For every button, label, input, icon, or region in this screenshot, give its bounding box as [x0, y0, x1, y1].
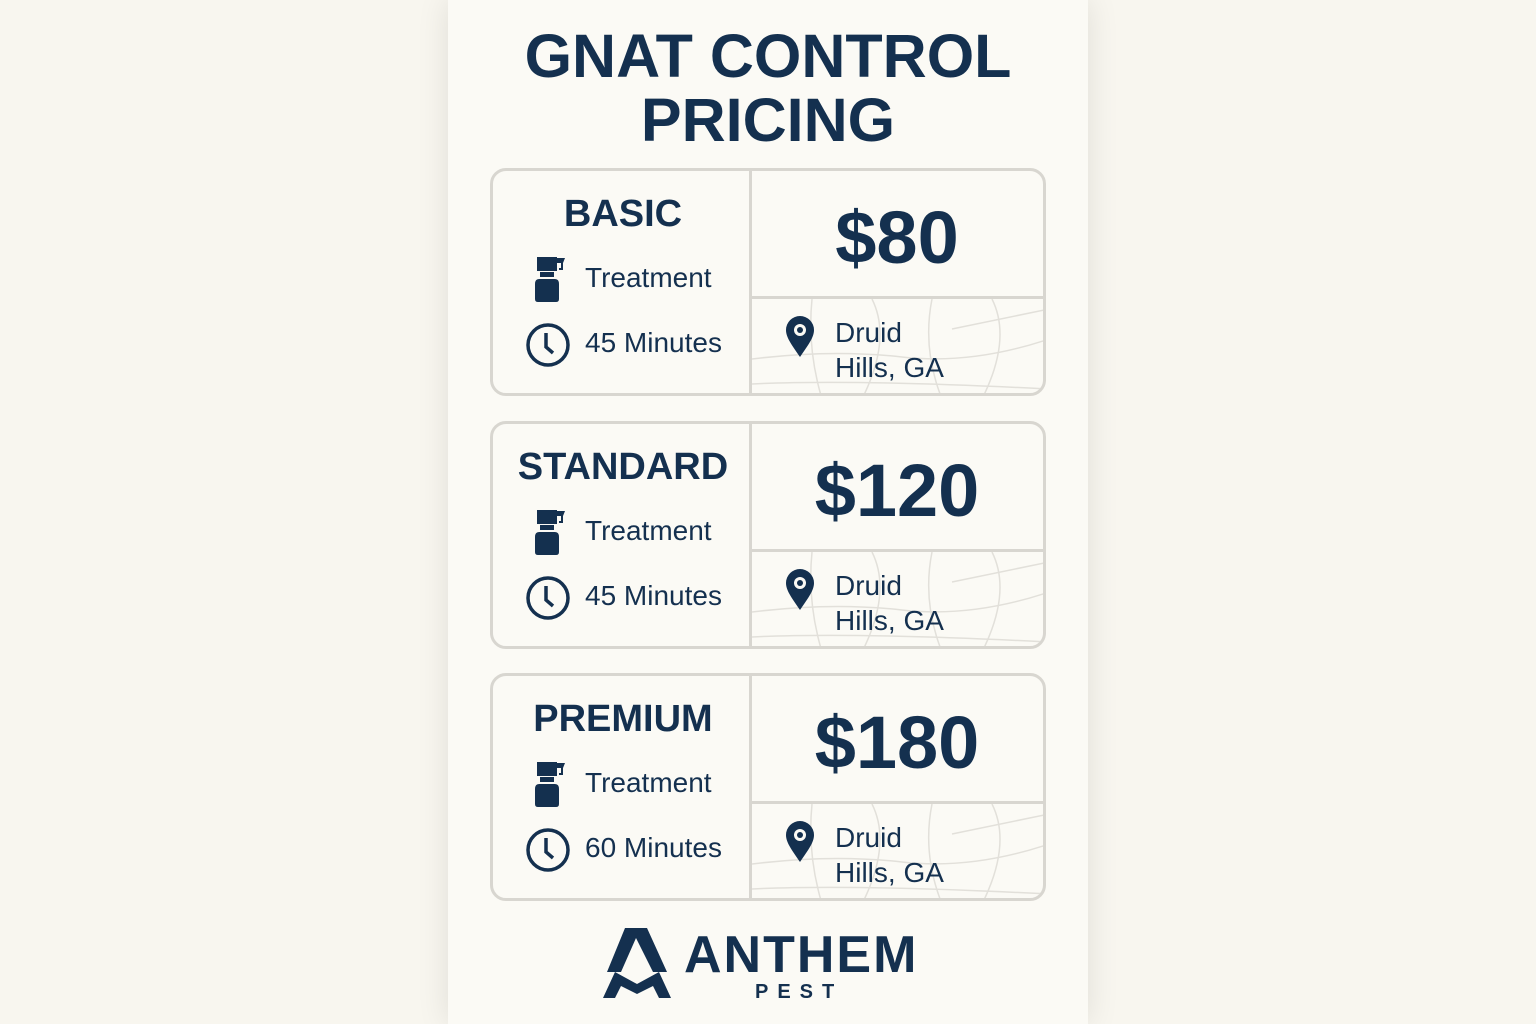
location — [835, 317, 944, 383]
icon: spray bottle — [535, 510, 565, 555]
card: standard — [490, 421, 1046, 649]
tier name: BASIC — [564, 193, 682, 235]
logo — [603, 926, 918, 1003]
map background — [752, 804, 1043, 898]
tier name: STANDARD — [518, 446, 728, 488]
location: Druid — [835, 822, 902, 853]
map background — [752, 552, 1043, 646]
card: basic — [490, 168, 1046, 396]
duration: 45 Minutes — [585, 580, 722, 611]
title: GNAT CONTROL — [525, 22, 1011, 90]
icon: clock — [526, 323, 570, 367]
location: Druid — [835, 570, 902, 601]
duration: 60 Minutes — [585, 832, 722, 863]
center panel — [448, 0, 1088, 1024]
treatment text: Treatment — [585, 515, 712, 546]
location: Druid — [835, 317, 902, 348]
icon: location pin — [786, 821, 814, 862]
icon: clock — [526, 576, 570, 620]
title — [525, 22, 1011, 154]
icon: location pin — [786, 316, 814, 357]
duration: 45 Minutes — [585, 327, 722, 358]
location — [835, 570, 944, 636]
icon: location pin — [786, 569, 814, 610]
icon: logo mark — [603, 928, 671, 998]
price: $180 — [815, 701, 979, 784]
map background — [752, 299, 1043, 393]
brand name: ANTHEM — [684, 926, 918, 984]
title: PRICING — [641, 86, 895, 154]
icon: spray bottle — [535, 762, 565, 807]
treatment text: Treatment — [585, 767, 712, 798]
location — [835, 822, 944, 888]
location: Hills, GA — [835, 605, 944, 636]
icon: clock — [526, 828, 570, 872]
card: premium — [490, 673, 1046, 901]
location: Hills, GA — [835, 352, 944, 383]
location: Hills, GA — [835, 857, 944, 888]
price: $80 — [835, 196, 959, 279]
price: $120 — [815, 449, 979, 532]
tier name: PREMIUM — [533, 698, 713, 740]
icon: spray bottle — [535, 257, 565, 302]
brand subtitle: PEST — [755, 981, 843, 1003]
treatment text: Treatment — [585, 262, 712, 293]
